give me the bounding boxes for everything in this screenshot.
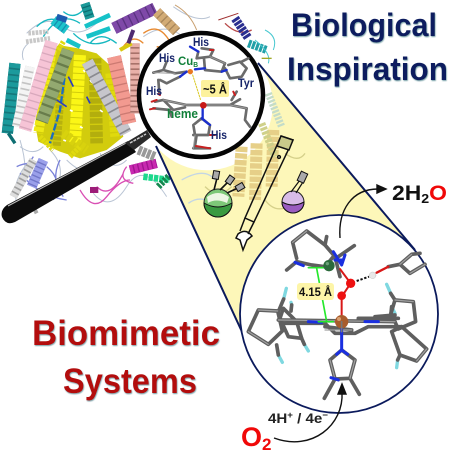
- salmon helix: [114, 57, 129, 123]
- faded protein in cone: [182, 93, 305, 209]
- yellow core: [35, 45, 123, 158]
- protein structure: [7, 3, 210, 213]
- magnified yellow cone: [156, 63, 415, 334]
- label: CuB: B: [193, 62, 198, 69]
- labels: residues: His: [193, 37, 209, 49]
- arrow: to water: [340, 185, 386, 238]
- title: Biological Inspiration: Inspiration: [287, 51, 448, 87]
- label: CuB: Cu: [178, 54, 194, 68]
- icon: schlenk tube: [236, 136, 293, 250]
- title: Biomimetic Systems: Systems: [63, 362, 197, 401]
- lower helices: [32, 160, 43, 187]
- label: 2H2O: 2: [421, 191, 429, 206]
- label: O2: O: [241, 422, 262, 452]
- tan helix: [157, 12, 177, 32]
- labels: residues: His: [146, 86, 162, 98]
- labels: residues: [146, 37, 254, 142]
- fluorine atoms: [278, 284, 398, 368]
- heme active site model: [150, 47, 250, 148]
- label: heme: heme: [167, 107, 198, 121]
- label: proton electron: 4H: [268, 410, 286, 426]
- label: 4.15 Å: 4.15 Å: [299, 284, 332, 299]
- labels: residues: His: [159, 53, 175, 65]
- icon: green flask: [204, 171, 245, 217]
- label: proton electron: −: [322, 410, 328, 420]
- cyan top: [85, 3, 90, 18]
- green distance lines: [308, 268, 333, 322]
- label: distance: ~5 Å: [203, 82, 228, 96]
- magnifying glass handle: [2, 130, 151, 223]
- silver helix: [87, 62, 126, 133]
- cone outline: [156, 63, 415, 334]
- title: Biomimetic Systems: [32, 314, 220, 401]
- oxygen bridge: [340, 269, 351, 315]
- protein red helix fragment: [207, 8, 225, 26]
- copper: [323, 260, 335, 271]
- label: proton electron: +: [287, 410, 293, 420]
- teal helix: [7, 63, 15, 133]
- label: 2H2O: 2H: [392, 182, 419, 205]
- nitrogen bonds: [295, 252, 378, 380]
- aryl rings: [248, 231, 427, 398]
- white helix: [17, 67, 30, 127]
- purple helix: [114, 8, 155, 28]
- pink helix: [25, 42, 52, 130]
- magnifying lens: active site: [139, 33, 263, 157]
- hydrogen bond: [357, 277, 369, 281]
- labels: residues: Tyr: [238, 78, 254, 90]
- protein top right fragment: [218, 13, 275, 63]
- label: proton electron: / 4e: [293, 410, 323, 426]
- title: Biomimetic Systems: Biomimetic: [32, 314, 220, 353]
- labels: residues: His: [211, 130, 227, 142]
- big biomimetic circle: [240, 215, 438, 413]
- iron: [335, 315, 348, 328]
- biomimetic molecule: [248, 231, 427, 398]
- glassware: [204, 136, 308, 250]
- title: Biological Inspiration: [287, 7, 448, 87]
- icon: purple flask: [282, 171, 308, 213]
- label: 2H2O: O: [429, 182, 447, 205]
- arrow: from oxygen: [274, 384, 346, 442]
- olive helix: [42, 50, 68, 122]
- title: Biological Inspiration: Biological: [291, 7, 437, 43]
